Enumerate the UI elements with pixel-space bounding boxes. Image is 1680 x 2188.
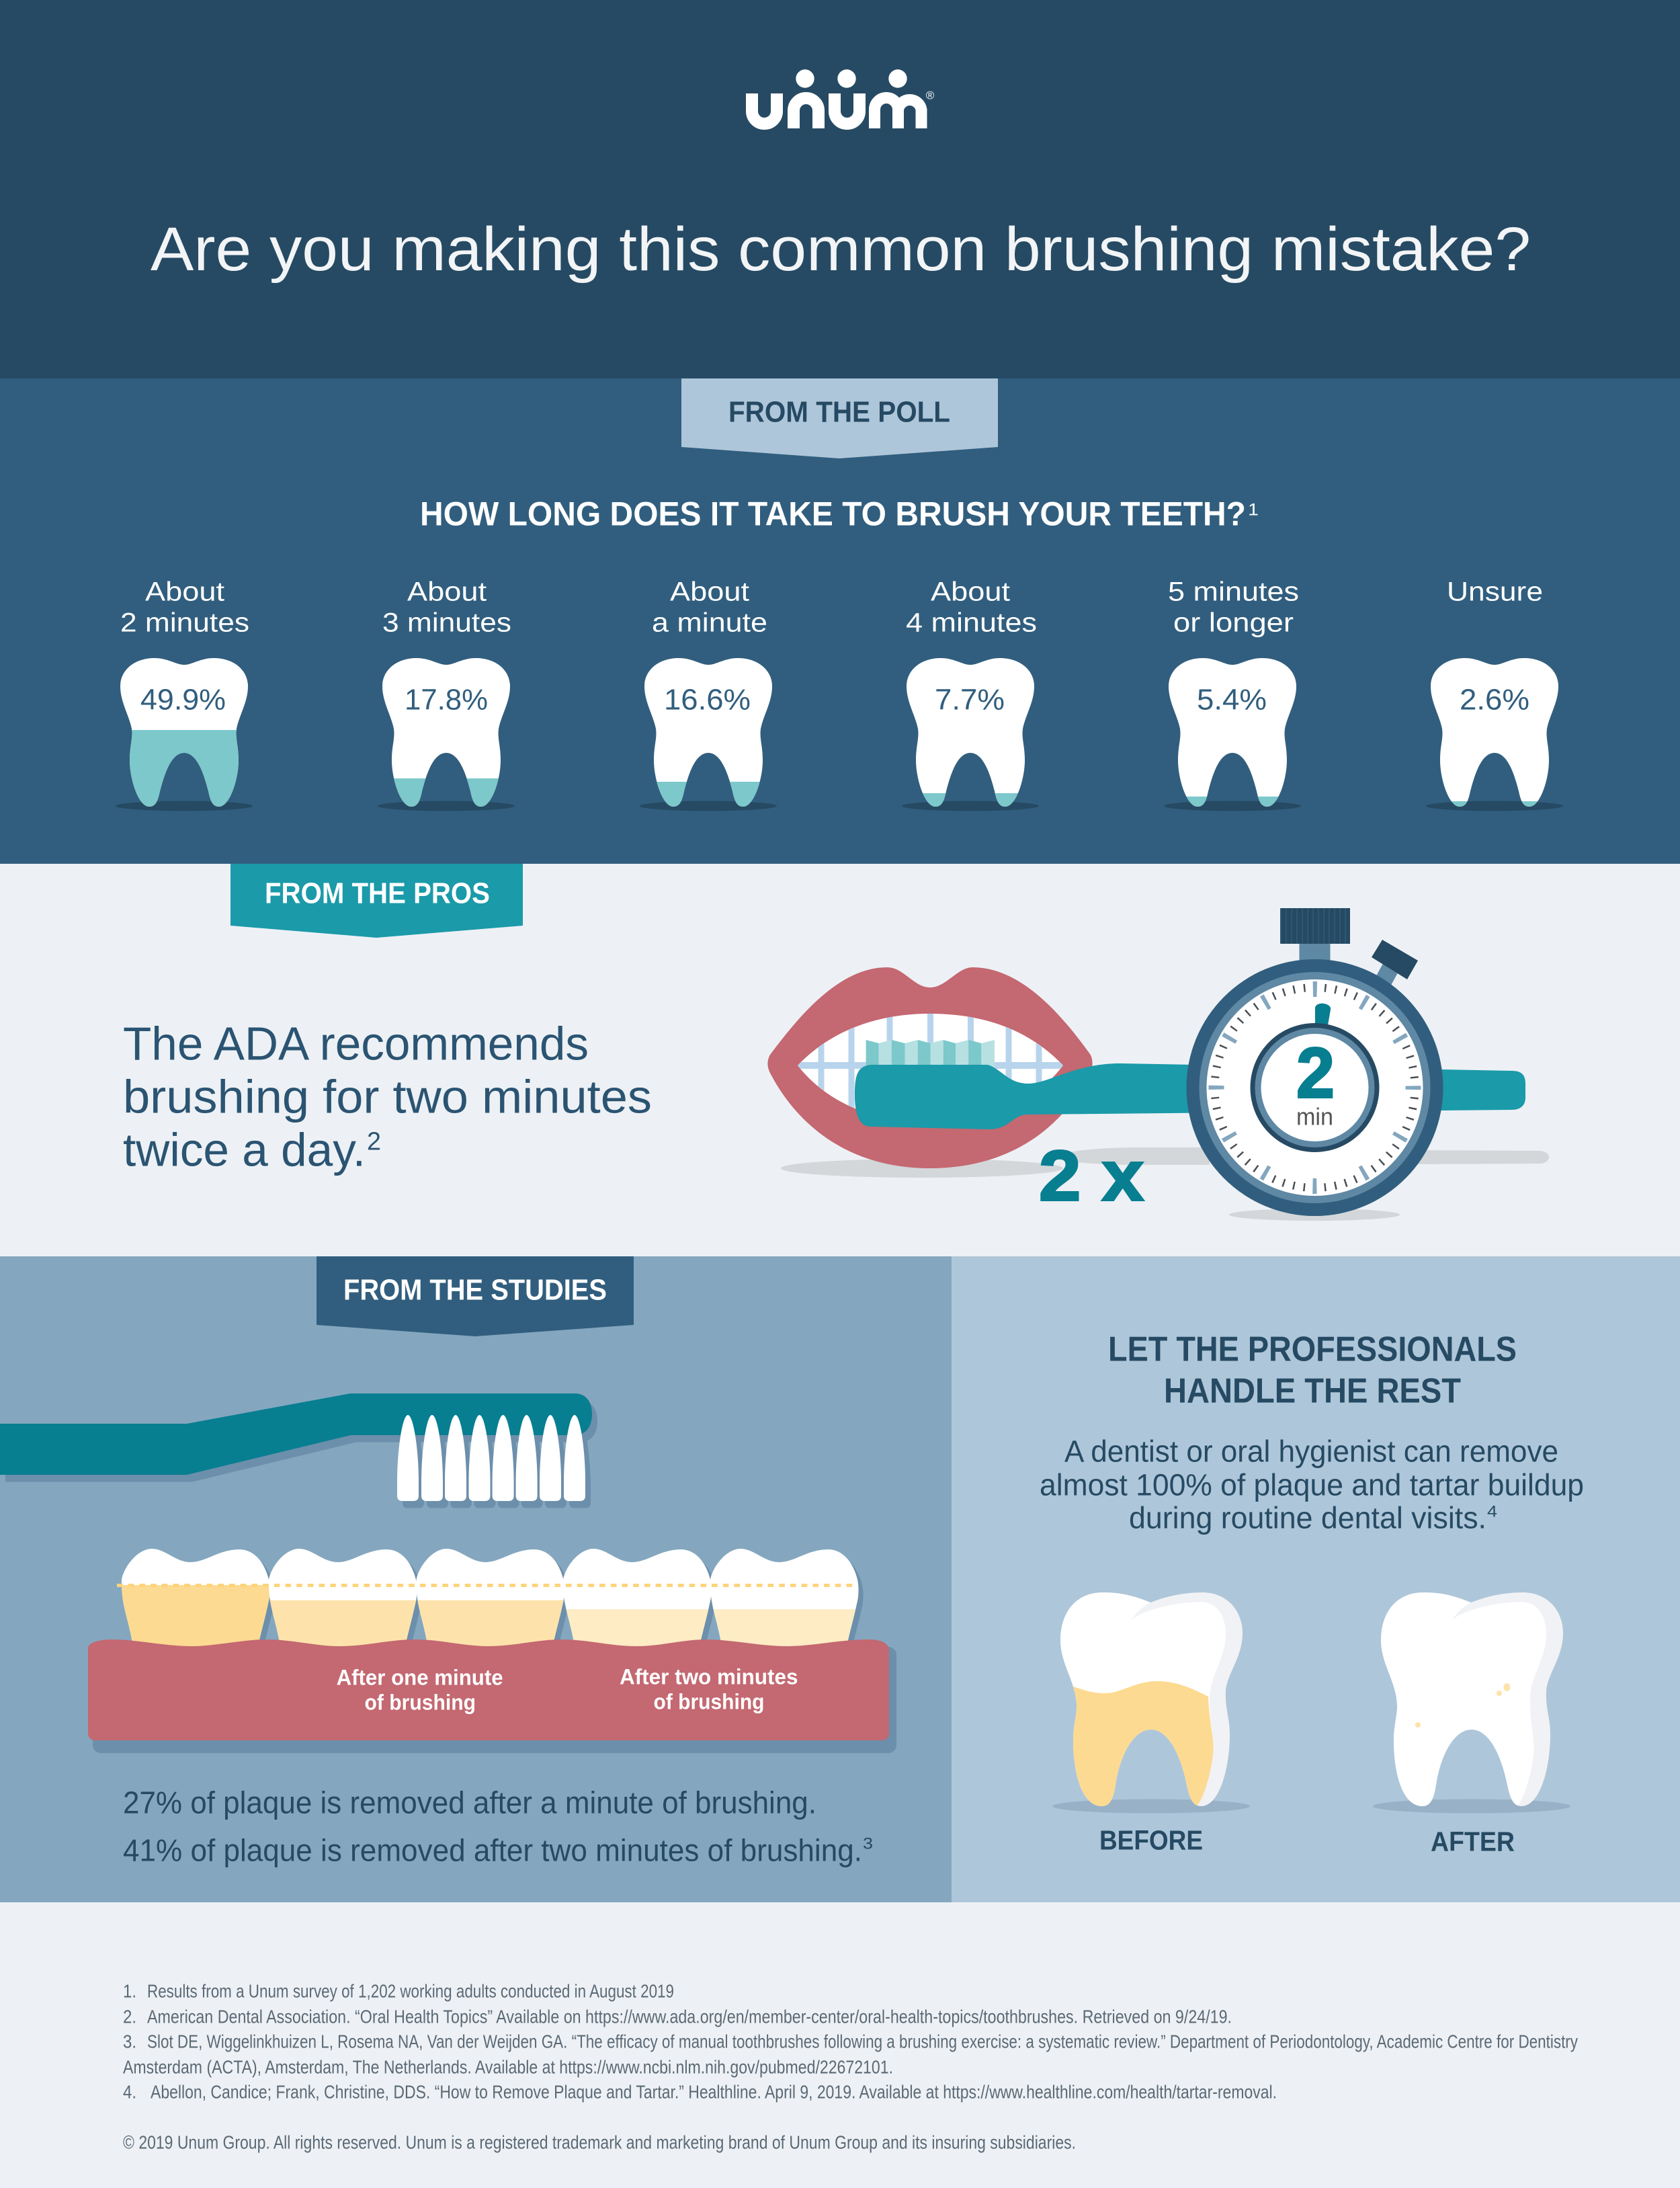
title: Are you making this common brushing mistake? (151, 215, 1531, 284)
poll item: about 4 minutes: About (931, 577, 1010, 606)
poll item: about 4 minutes: 7.7% (935, 683, 1005, 717)
footnotes: Abellon, Candice; Frank, Christine, DDS. “How to Remove Plaque and Tartar.” Healthline. April 9, 2019. Available at https://www.healthline.com/health/tartar-removal. (151, 2081, 1277, 2103)
icon: mouth (767, 967, 1093, 1168)
poll item: about 4 minutes (902, 577, 1039, 813)
tooth: after one minute, left (269, 1549, 417, 1646)
footnotes (123, 1980, 1578, 2103)
poll item: about a minute (640, 577, 777, 815)
ribbon: from the pros: FROM THE PROS (265, 877, 490, 910)
text: plaque statistics (123, 1785, 873, 1867)
label: after one minute: After one minute (337, 1666, 503, 1690)
label: after one minute (337, 1666, 503, 1714)
text: plaque statistics: 27% of plaque is removed after a minute of brushing. (123, 1785, 816, 1820)
poll item: 5 minutes or longer: 5.4% (1197, 683, 1267, 717)
poll item: about a minute: About (670, 577, 749, 606)
poll item: 5 minutes or longer (1164, 577, 1301, 813)
poll item: about a minute: 16.6% (664, 683, 751, 717)
poll item: about 2 minutes: 2 minutes (120, 608, 249, 637)
illustration: teeth and gums (88, 1549, 896, 1753)
label: after two minutes: After two minutes (620, 1664, 798, 1689)
shadows under mouth and brush (781, 1147, 1549, 1178)
footnotes: American Dental Association. “Oral Health Topics” Available on https://www.ada.org/en/member-center/oral-health-topics/toothbrushes. Retrieved on 9/24/19. (147, 2006, 1232, 2027)
poll item: unsure: Unsure (1447, 577, 1543, 606)
label: after two minutes (620, 1664, 798, 1714)
ribbon: from the studies (317, 1256, 634, 1336)
panel: from the studies (0, 1256, 952, 1902)
poll item: 5 minutes or longer: or longer (1173, 608, 1294, 637)
panel: let the professionals handle the rest (952, 1256, 1680, 1902)
footnotes: 3. (123, 2031, 136, 2052)
ribbon: from the studies: FROM THE STUDIES (343, 1273, 607, 1307)
text: dentist paragraph (1040, 1434, 1584, 1535)
text: ADA recommendation: twice a day. (123, 1124, 366, 1176)
footnotes: 4. (123, 2081, 136, 2103)
copyright: © 2019 Unum Group. All rights reserved. Unum is a registered trademark and marketing brand of Unum Group and its insuring subsidiaries. (123, 2132, 1076, 2152)
label: 2 x: 2 x (1039, 1136, 1144, 1215)
poll item: about 3 minutes: About (407, 577, 487, 606)
tooth: after one minute, right (417, 1549, 564, 1646)
poll item: about a minute: a minute (652, 608, 767, 637)
icon: toothbrush (855, 1063, 1525, 1129)
poll item: about 3 minutes (378, 577, 515, 812)
icon: tooth after (1373, 1592, 1570, 1814)
text: dentist paragraph: almost 100% of plaque and tartar buildup (1040, 1468, 1584, 1502)
text: ADA recommendation (123, 1018, 652, 1176)
text: ADA recommendation: 2 (367, 1128, 381, 1156)
poll item: about 3 minutes: 17.8% (405, 683, 488, 717)
poll item: about 3 minutes: 3 minutes (382, 608, 511, 637)
poll item: unsure: 2.6% (1460, 683, 1529, 717)
icon: tooth before (1052, 1592, 1250, 1814)
text: dentist paragraph: A dentist or oral hygienist can remove (1064, 1434, 1558, 1468)
poll item: 5 minutes or longer: 5 minutes (1168, 577, 1299, 606)
ribbon: from the pros (230, 864, 523, 938)
footnotes: Amsterdam (ACTA), Amsterdam, The Netherlands. Available at https://www.ncbi.nlm.nih.gov/pubmed/22672101. (123, 2057, 893, 2077)
poll item: about 2 minutes (116, 577, 253, 811)
panel: from the poll (0, 378, 1680, 864)
text: dentist paragraph: 4 (1487, 1503, 1497, 1521)
ribbon: from the poll: FROM THE POLL (728, 395, 950, 429)
illustration: toothbrush brushing (0, 1393, 597, 1508)
icon: stopwatch: 2 (1296, 1034, 1335, 1113)
panel: from the pros (124, 864, 1549, 1221)
heading: LET THE PROFESSIONALS (1108, 1330, 1517, 1369)
tooth: before brushing (122, 1549, 269, 1646)
poll item: unsure (1426, 577, 1563, 815)
text: ADA recommendation: brushing for two minutes (123, 1070, 652, 1123)
poll item: about 2 minutes: 49.9% (140, 683, 226, 717)
panel: header (0, 0, 1680, 378)
poll question heading: HOW LONG DOES IT TAKE TO BRUSH YOUR TEETH? (420, 495, 1246, 532)
footnotes: Results from a Unum survey of 1,202 working adults conducted in August 2019 (147, 1980, 674, 2002)
text: ADA recommendation: The ADA recommends (123, 1018, 589, 1070)
gums (88, 1639, 889, 1740)
label: after: AFTER (1431, 1826, 1515, 1857)
footnotes: 2. (123, 2006, 136, 2027)
heading: HANDLE THE REST (1164, 1371, 1461, 1410)
footnotes: 1. (123, 1980, 136, 2002)
logo: unum: ® (926, 89, 935, 102)
icon: stopwatch (1187, 908, 1443, 1221)
label: before: BEFORE (1099, 1824, 1203, 1855)
text: plaque statistics: 41% of plaque is removed after two minutes of brushing. (123, 1832, 862, 1867)
poll item: about 2 minutes: About (145, 577, 224, 606)
label: after one minute: of brushing (364, 1690, 476, 1714)
poll item: about 4 minutes: 4 minutes (906, 608, 1037, 637)
ribbon: from the poll (681, 378, 998, 458)
logo: unum (752, 69, 935, 128)
tooth: after two minutes, right (710, 1549, 859, 1646)
toothbrush bristles (866, 1040, 995, 1069)
text: plaque statistics: 3 (863, 1835, 873, 1853)
heading (1108, 1330, 1517, 1410)
icon: stopwatch: min (1296, 1102, 1333, 1131)
tooth: after two minutes, left (563, 1549, 711, 1646)
text: dentist paragraph: during routine dental visits. (1129, 1500, 1486, 1535)
label: after two minutes: of brushing (653, 1690, 765, 1714)
poll question heading: 1 (1248, 500, 1259, 519)
